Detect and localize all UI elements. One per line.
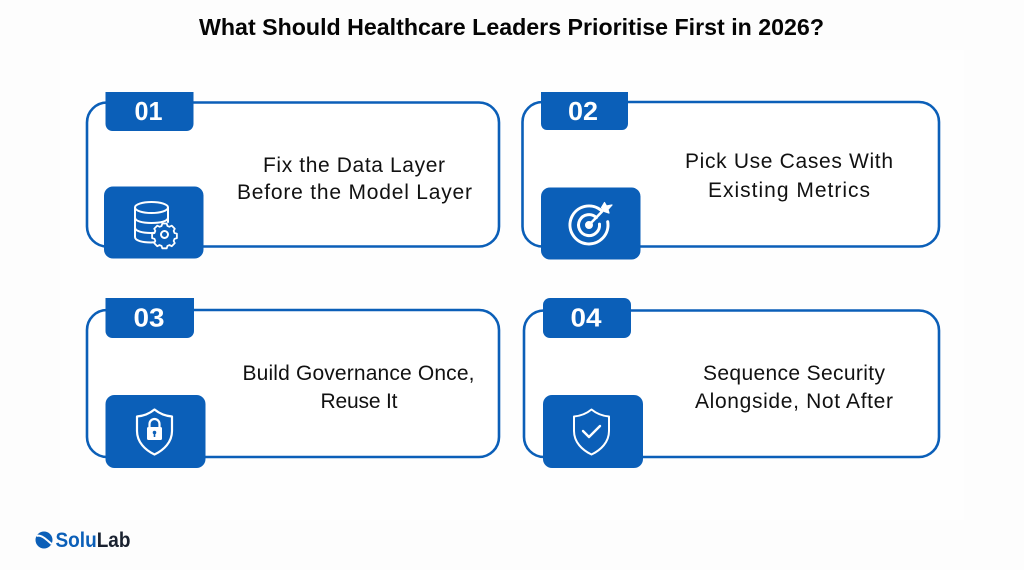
number 02: 02 (568, 96, 598, 126)
card outline 03 (87, 310, 499, 457)
icon box 02 (541, 188, 640, 260)
panel: card 02 (522, 92, 939, 260)
card outline 02 (522, 102, 939, 246)
card outline 01 (87, 102, 499, 246)
text: card 04: Sequence Security (703, 362, 886, 385)
number tab 01 (106, 92, 194, 131)
icon: database with gear (135, 202, 177, 248)
logo wordmark: SoluLab (56, 529, 130, 552)
panel: card 03 (87, 298, 499, 468)
text: card 03: Build Governance Once, (242, 362, 474, 385)
icon box 03 (106, 395, 206, 468)
text: card 04: Alongside, Not After (695, 390, 893, 413)
number tab 02 (541, 92, 628, 130)
number 03: 03 (134, 302, 164, 332)
text: card 02: Pick Use Cases With (685, 150, 893, 173)
text: card 02 (685, 150, 893, 202)
icon: target with arrow (570, 202, 612, 244)
number 04: 04 (570, 302, 602, 332)
panel: card 04 (524, 298, 939, 468)
panel: card 01 (87, 92, 499, 258)
number tab 03 (106, 298, 194, 338)
text: card 03: Reuse It (320, 390, 398, 413)
icon box 01 (104, 186, 204, 258)
number 01: 01 (134, 96, 162, 126)
text: card 01 (237, 154, 472, 204)
text: card 01: Before the Model Layer (237, 181, 472, 204)
logo: SoluLab (36, 529, 130, 552)
text: card 02: Existing Metrics (708, 179, 870, 202)
title: What Should Healthcare Leaders Prioritise First in 2026? (199, 14, 824, 40)
icon: shield with check (574, 410, 609, 454)
text: card 03 (242, 362, 474, 413)
icon box 04 (543, 395, 643, 468)
text: card 01: Fix the Data Layer (263, 154, 445, 177)
text: card 04 (695, 362, 893, 413)
icon: shield with lock (137, 410, 172, 454)
number tab 04 (543, 298, 631, 338)
card outline 04 (524, 310, 939, 457)
icon: logo mark (36, 532, 52, 548)
